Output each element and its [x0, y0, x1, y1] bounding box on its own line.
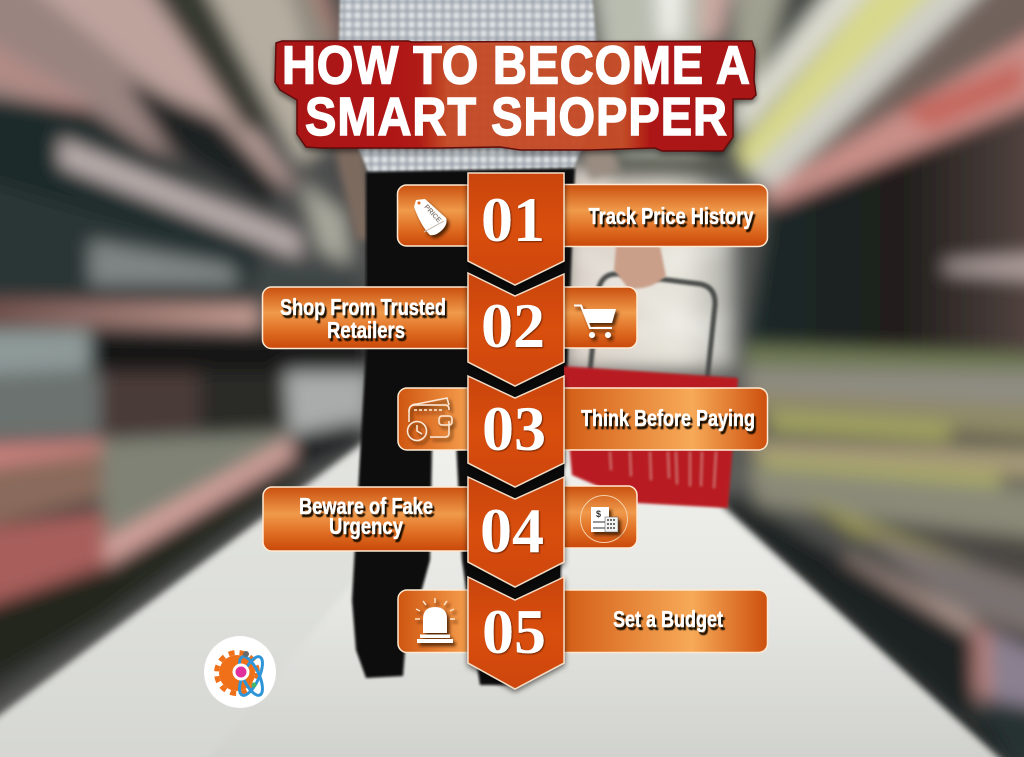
step 1 label panel [552, 184, 768, 246]
title [275, 35, 756, 151]
step 2 label: Retailers [327, 317, 405, 343]
title red backing [275, 41, 756, 151]
chevron 05 [468, 577, 564, 689]
number 02: 02 [481, 290, 545, 361]
black chevron shadows [466, 260, 564, 601]
aisle back wall behind basket [565, 155, 735, 370]
step 3 icon panel [398, 388, 483, 450]
photo: shopper with basket [330, 0, 738, 685]
step 4 label: Beware of Fake [299, 493, 433, 519]
icon: price tag [414, 199, 446, 235]
step 3 label: Think Before Paying [581, 405, 755, 431]
basket handle [590, 274, 715, 382]
left shelving wall [0, 0, 380, 720]
chevron 02 [468, 273, 564, 386]
step 5 row [398, 590, 768, 652]
checked shirt [338, 0, 602, 176]
step 4 label panel right [552, 486, 637, 548]
chevron 03 [468, 376, 564, 487]
logo atom [235, 654, 267, 698]
logo gear [216, 652, 258, 694]
chevron 04 [468, 477, 564, 587]
step 2 row [262, 287, 637, 348]
chevron 01 [468, 173, 564, 285]
step 2 label panel right [552, 287, 637, 348]
hand holding basket [614, 246, 666, 288]
number 04: 04 [480, 495, 544, 566]
logo badge [204, 636, 276, 708]
icon: budget checklist and calculator: $ [596, 509, 601, 519]
icon: price tag: PRICE [423, 204, 442, 224]
red basket [562, 366, 738, 508]
shopper arms [330, 110, 620, 240]
icon: budget checklist and calculator [580, 496, 628, 542]
step 4 label: Urgency [329, 513, 403, 539]
number 01: 01 [481, 184, 545, 255]
aisle floor [0, 350, 1012, 757]
logo nucleus [232, 651, 256, 688]
step 1 icon panel [398, 185, 482, 246]
black trousers [352, 168, 575, 685]
step 5 label panel [552, 590, 768, 652]
step 3 label panel [552, 388, 768, 450]
step 2 label: Shop From Trusted [280, 294, 446, 320]
step 1 row [398, 184, 768, 246]
step 1 label: Track Price History [588, 203, 754, 229]
right shelving wall [590, 0, 1024, 757]
step 4 label panel [263, 487, 483, 551]
step 2 label panel [262, 287, 482, 348]
icon: shopping cart [574, 306, 616, 338]
step 5 label: Set a Budget [613, 606, 723, 632]
step 3 row [398, 388, 768, 450]
step 4 row [263, 486, 637, 551]
step 5 icon panel [398, 590, 483, 652]
number 03: 03 [482, 393, 546, 464]
number 05: 05 [482, 596, 546, 667]
title line 1: HOW TO BECOME A [282, 35, 750, 95]
title line 2: SMART SHOPPER [305, 86, 727, 147]
icon: wallet and clock [408, 398, 452, 440]
icon: alarm siren [415, 598, 455, 643]
